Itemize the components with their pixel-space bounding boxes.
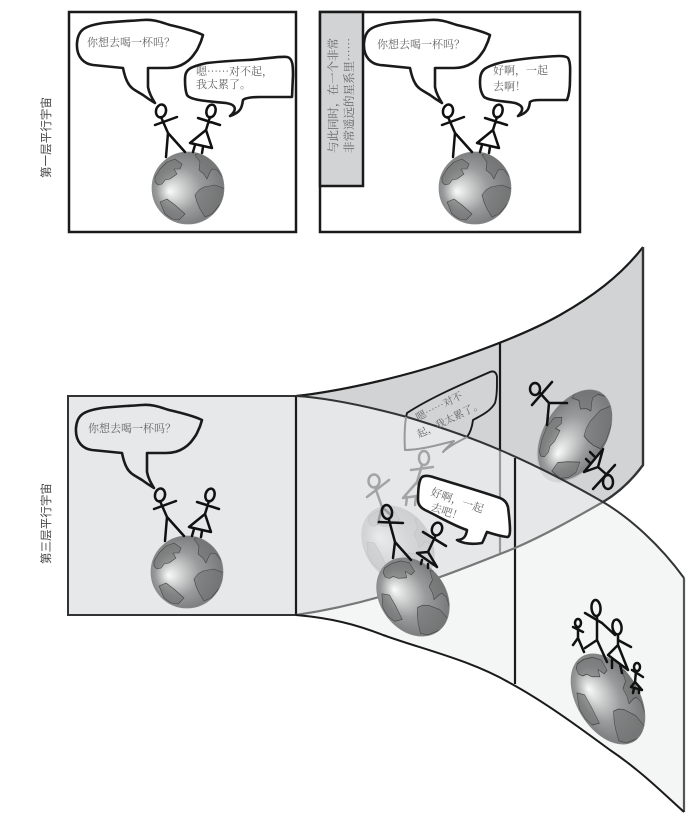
figures: man and woman [154,488,219,541]
figures: family of four [573,600,643,693]
upper branch scene: globe and couple [528,380,616,490]
sheet: lower branch [296,502,684,812]
speech bubble: refusal: 嗯……对不起， [196,63,273,79]
figure: sideways man [530,382,567,425]
speech bubble: acceptance: 好啊，一起 [493,62,548,78]
speech bubble: question [364,20,490,103]
icon: globe [439,151,514,224]
figures: man and woman [442,104,507,157]
icon: globe [152,151,227,224]
label: first layer parallel universe: 第一层平行宇宙 [38,97,54,178]
label: third layer parallel universe: 第三层平行宇宙 [38,483,54,564]
ghost speech bubble: refusal seen through sheet [405,371,497,452]
speech bubble: acceptance [480,56,570,116]
caption box: meanwhile: 非常遥远的星系里…… [341,38,357,153]
icon: skewed globe [538,390,612,480]
panel: third layer branching universes [68,247,684,812]
ghost figures: couple seen through sheet [367,451,433,523]
icon: skewed globe in lower branch [564,635,655,764]
sheet: upper branch [296,247,643,615]
caption box: meanwhile: 与此同时，在一个非常 [325,38,341,153]
panel: first layer right comic [320,12,580,232]
panel: first layer left comic [69,12,296,232]
ghost speech bubble: refusal seen through sheet: 嗯……对不 [413,387,465,424]
icon: globe [151,535,226,608]
speech bubble: refusal: 我太累了。 [196,76,251,92]
speech bubble: question [76,405,202,488]
speech bubble: acceptance on middle sheet: 好啊，一起 [429,484,486,517]
sheet: middle section [296,396,603,620]
ghost speech bubble: refusal seen through sheet: 起，我太累了。 [414,396,484,441]
figures: man and woman [155,104,220,157]
figure: sideways woman [584,449,615,489]
figures: front couple [379,504,446,568]
ghost globe: through sheet [352,490,447,601]
caption box: meanwhile [320,12,363,186]
speech bubble: question: 你想去喝一杯吗？ [377,36,465,52]
globe ghost: upper branch shadow [528,370,623,501]
speech bubble: question: 你想去喝一杯吗？ [88,420,176,436]
dividers and sheet outlines [296,247,684,812]
speech bubble: question: 你想去喝一杯吗？ [87,34,175,50]
icon: skewed globe in middle [367,542,462,653]
panel section: flat left comic [68,396,296,615]
speech bubble: refusal [185,57,293,116]
speech bubble: acceptance: 去啊！ [493,78,526,94]
speech bubble: question [77,20,203,103]
speech bubble: acceptance on middle sheet: 去吧！ [429,499,465,525]
speech bubble: acceptance on middle sheet [418,476,510,544]
